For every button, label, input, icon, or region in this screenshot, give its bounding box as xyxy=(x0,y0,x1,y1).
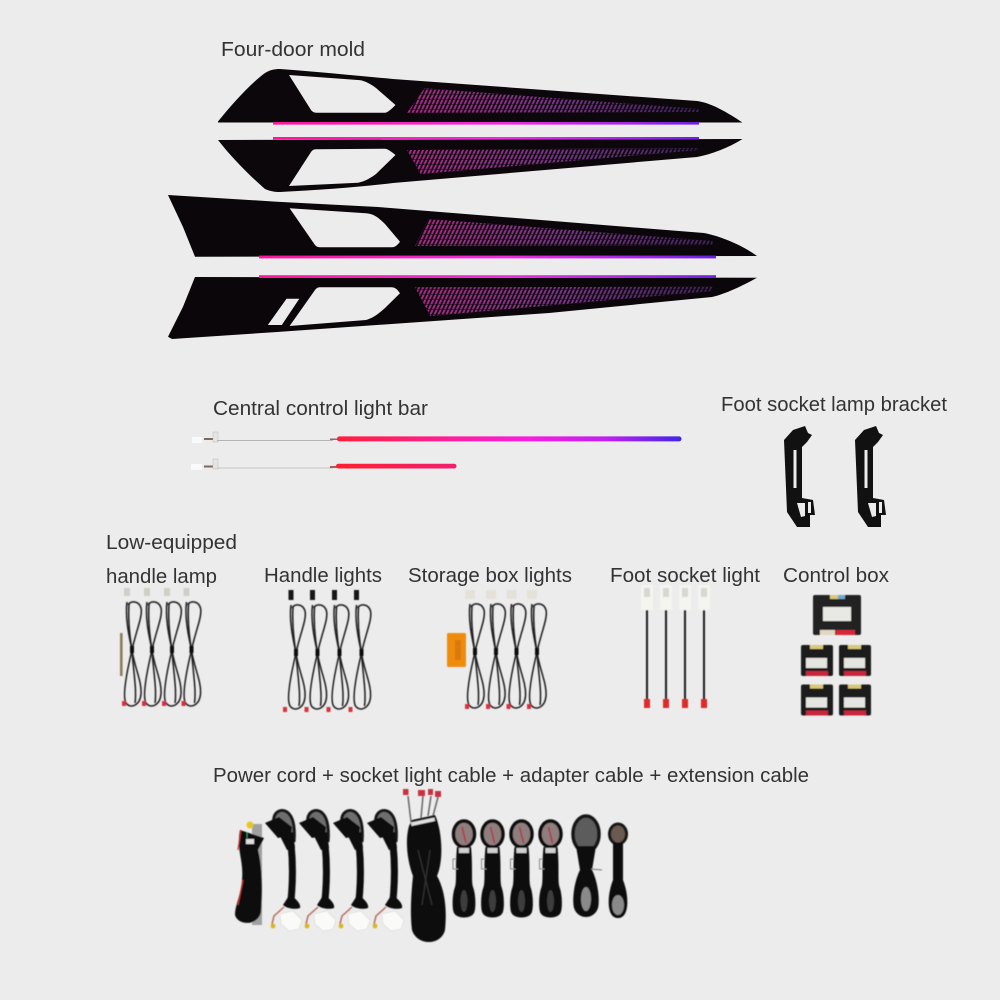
wire 4 xyxy=(348,590,371,712)
heading: Control box: Control box xyxy=(783,565,889,587)
wire 3 xyxy=(679,585,691,708)
short light bar with connector xyxy=(191,459,456,470)
wire 3 xyxy=(162,588,181,706)
wire 3 xyxy=(506,590,526,709)
trim piece: rear lower xyxy=(168,275,757,339)
wire 2 xyxy=(660,585,672,708)
bracket right xyxy=(855,426,886,527)
heading: Four-door mold: Four-door mold xyxy=(221,39,365,61)
wire 3 xyxy=(326,590,349,712)
small box 4 xyxy=(839,684,871,716)
wire 1 xyxy=(641,585,653,708)
adapter coil 2 xyxy=(481,821,504,918)
socket cable 4 xyxy=(367,810,404,931)
parts: control boxes xyxy=(801,595,871,716)
wire 4 xyxy=(182,588,201,706)
wire 2 xyxy=(142,588,161,706)
parts: low-equipped handle lamp wires xyxy=(120,588,201,706)
adapter coil 3 xyxy=(510,821,533,918)
heading: Low-equipped handle lamp xyxy=(106,532,237,588)
adapter coil 1 xyxy=(453,821,475,918)
wire 4 xyxy=(527,590,546,709)
heading: Storage box lights: Storage box lights xyxy=(408,565,572,587)
long light bar with connector xyxy=(192,432,682,443)
extension cable 1 xyxy=(573,816,602,917)
heading: Handle lights: Handle lights xyxy=(264,565,382,587)
wire 4 xyxy=(698,585,710,708)
trim piece: rear upper xyxy=(168,195,757,258)
small box 1 xyxy=(801,645,833,676)
socket cable 2 xyxy=(299,810,336,931)
parts: storage box light wires xyxy=(447,590,546,709)
adapter cable bundle xyxy=(403,789,446,942)
light bars: central control xyxy=(191,432,682,470)
wire 1 xyxy=(465,590,484,709)
heading: Power cord + socket light cable + adapter cable + extension cable: Power cord + socket light cable + adapter cable + extension cable xyxy=(213,765,809,787)
extension cable 2 xyxy=(609,824,627,918)
heading: Low-equipped handle lamp: Low-equipped xyxy=(106,532,237,554)
parts: foot socket light wires xyxy=(641,585,710,708)
small box 2 xyxy=(839,645,871,676)
socket cable 3 xyxy=(333,810,370,931)
panel: four-door trim moldings xyxy=(168,69,757,339)
wire 2 xyxy=(304,590,327,712)
socket cable 1 xyxy=(265,810,302,931)
parts: handle light wires xyxy=(283,590,371,712)
drill bit xyxy=(120,633,123,676)
heading: Low-equipped handle lamp: handle lamp xyxy=(106,566,217,588)
heading: Foot socket lamp bracket: Foot socket lamp bracket xyxy=(721,394,947,416)
parts: power and extension cables xyxy=(235,789,627,942)
heading: Central control light bar: Central control light bar xyxy=(213,398,428,420)
main control box xyxy=(813,595,861,635)
wire 2 xyxy=(486,590,505,709)
trim piece: front upper xyxy=(218,69,742,125)
small box 3 xyxy=(801,684,833,716)
foot socket lamp brackets xyxy=(784,426,886,527)
orange module xyxy=(447,633,466,667)
adapter coil 4 xyxy=(539,821,562,918)
power cord xyxy=(235,822,264,925)
bracket left xyxy=(784,426,815,527)
wire 1 xyxy=(283,590,305,712)
heading: Foot socket light: Foot socket light xyxy=(610,565,760,587)
trim piece: front lower xyxy=(218,137,742,192)
wire 1 xyxy=(122,588,141,706)
